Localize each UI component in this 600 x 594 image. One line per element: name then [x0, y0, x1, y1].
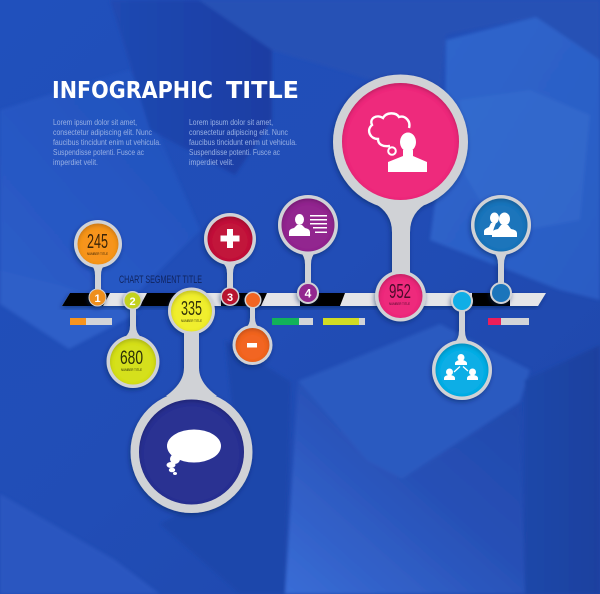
- pin purple with marker 4: 4: [305, 286, 312, 300]
- title: TITLE: [226, 77, 299, 104]
- pin 335 with speech bubble circle: [130, 288, 252, 513]
- text block: right column: Suspendisse potenti. Fusce ac: [189, 147, 281, 157]
- pin 680 with marker 2: [106, 291, 160, 388]
- chart segment title: CHART SEGMENT TITLE: [119, 274, 202, 286]
- legend bar: green: [272, 318, 313, 325]
- pin cyan with network icon: [432, 290, 492, 400]
- text block: right column: consectetur adipiscing elit. Nunc: [189, 127, 289, 137]
- legend bar: orange: [70, 318, 112, 325]
- pin plus with marker 3: 3: [227, 292, 233, 304]
- pin 680 with marker 2: 680: [120, 348, 143, 369]
- text block: left column: Suspendisse potenti. Fusce ac: [53, 147, 145, 157]
- title: INFOGRAPHIC: [52, 77, 213, 104]
- text block: right column: faucibus tincidunt enim ut vehicula.: [189, 137, 297, 147]
- pin blue with people icon: [471, 195, 531, 304]
- pin 335 with speech bubble circle: NUMBER TITLE: [181, 318, 202, 323]
- pin large pink with 952: 952: [389, 281, 411, 303]
- pin minus: [232, 292, 272, 365]
- pin 245 with marker 1: NUMBER TITLE: [87, 251, 108, 256]
- pin purple with marker 4: [278, 195, 338, 304]
- icon: person with text lines: [289, 214, 327, 236]
- pin large pink with 952: NUMBER TITLE: [389, 301, 410, 306]
- pin plus with marker 3: [204, 213, 256, 306]
- text block: left column: imperdiet velit.: [53, 157, 98, 167]
- pin 335 with speech bubble circle: 335: [181, 298, 202, 320]
- icon: two people: [484, 212, 517, 237]
- pin 680 with marker 2: NUMBER TITLE: [121, 367, 142, 372]
- icon: thinking person: [369, 113, 427, 172]
- pin large pink with 952: [333, 74, 468, 322]
- icon: network of people: [444, 354, 478, 380]
- icon: plus: [220, 229, 240, 248]
- pin 245 with marker 1: 245: [87, 231, 108, 253]
- text block: right column: imperdiet velit.: [189, 157, 234, 167]
- text block: left column: consectetur adipiscing elit. Nunc: [53, 127, 153, 137]
- text block: left column: faucibus tincidunt enim ut vehicula.: [53, 137, 161, 147]
- legend bar: yellow: [323, 318, 365, 325]
- pin 245 with marker 1: [74, 220, 122, 306]
- text block: left column: Lorem ipsum dolor sit amet,: [53, 117, 137, 127]
- pin 680 with marker 2: 2: [129, 296, 136, 308]
- icon: speech bubble: [166, 430, 221, 475]
- icon: minus: [247, 343, 257, 348]
- timeline bar: [62, 293, 546, 306]
- legend bar: red: [488, 318, 529, 325]
- pin 245 with marker 1: 1: [94, 293, 101, 305]
- text block: right column: Lorem ipsum dolor sit amet,: [189, 117, 273, 127]
- text block: left column: [53, 117, 161, 167]
- text block: right column: [189, 117, 297, 167]
